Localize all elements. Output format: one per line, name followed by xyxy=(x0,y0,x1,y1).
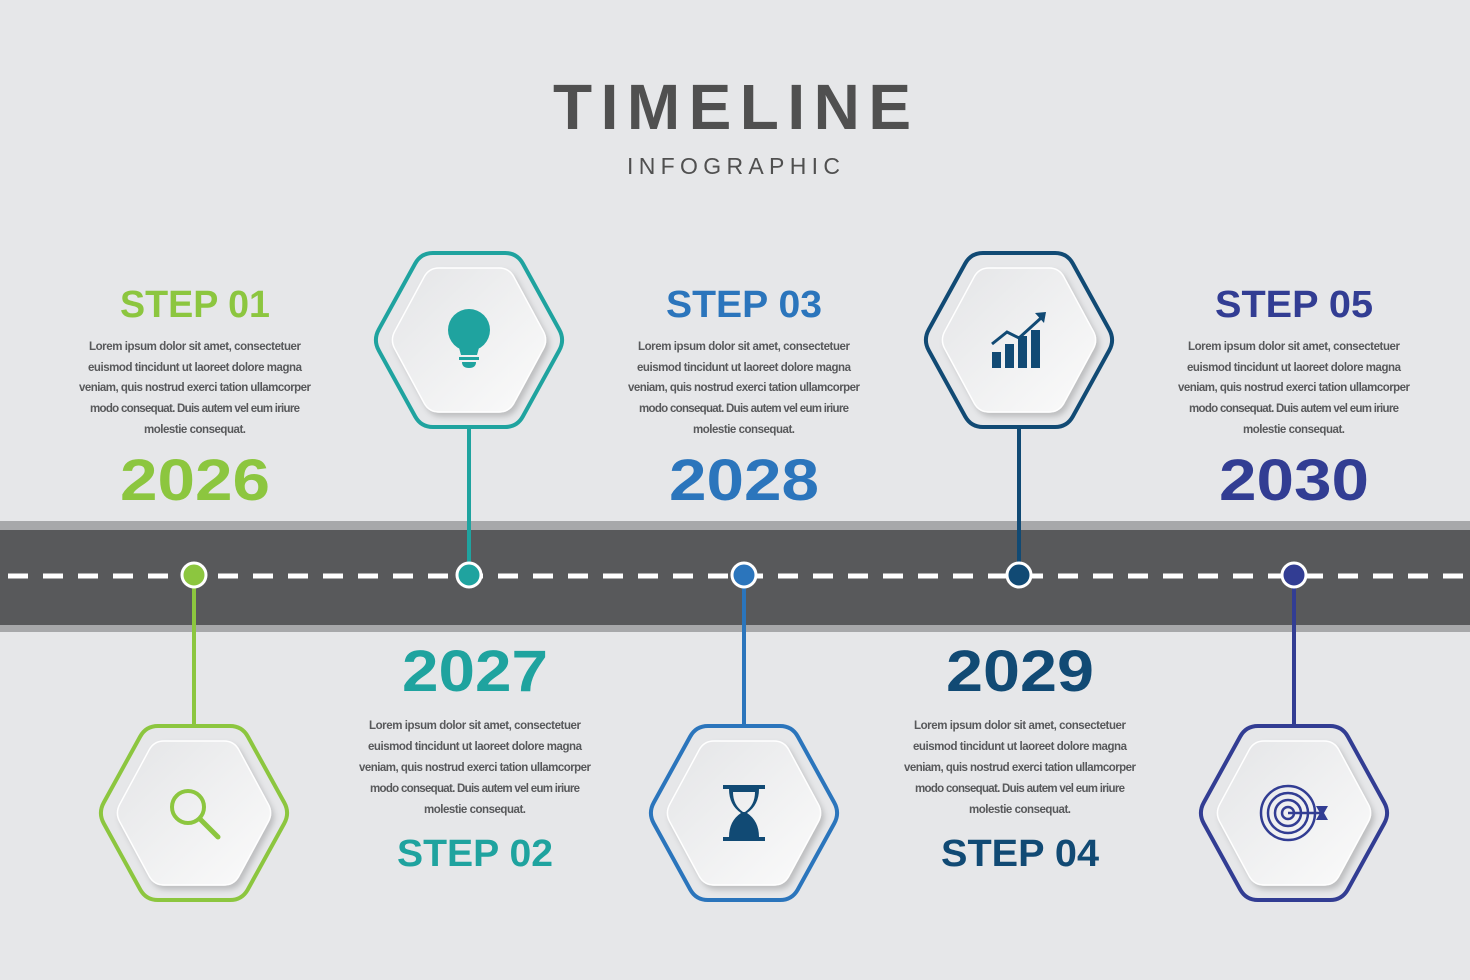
step 05 panel xyxy=(1178,284,1411,900)
connector 05 xyxy=(1292,575,1296,726)
icon: hourglass xyxy=(723,785,765,841)
icon: magnifier xyxy=(172,791,218,837)
step 03 text: molestie consequat. xyxy=(693,424,795,436)
step 04 panel xyxy=(904,253,1137,875)
step 01 text: Lorem ipsum dolor sit amet, consectetuer xyxy=(89,341,302,353)
step 04 text: Lorem ipsum dolor sit amet, consectetuer xyxy=(914,720,1127,732)
connector 02 xyxy=(467,427,471,575)
hexagon 01 xyxy=(101,726,287,900)
connector 03 xyxy=(742,575,746,726)
step 04 text: veniam, quis nostrud exerci tation ullamcorper xyxy=(904,762,1137,774)
step 03 text: modo consequat. Duis autem vel eum iriure xyxy=(639,403,849,415)
step 05 text: molestie consequat. xyxy=(1243,424,1345,436)
connector 04 xyxy=(1017,427,1021,575)
step 01 text: veniam, quis nostrud exerci tation ullamcorper xyxy=(79,382,312,394)
icon: growth chart xyxy=(992,312,1046,368)
step 04 heading: STEP 04 xyxy=(941,833,1099,875)
step 01 text: euismod tincidunt ut laoreet dolore magna xyxy=(88,362,303,374)
step 03 heading: STEP 03 xyxy=(666,284,822,326)
node 02 xyxy=(457,563,481,587)
step 02 text xyxy=(359,720,592,816)
step 05 text xyxy=(1178,341,1411,436)
step 03 text xyxy=(628,341,861,436)
step 03 text: euismod tincidunt ut laoreet dolore magna xyxy=(637,362,852,374)
node 04 xyxy=(1007,563,1031,587)
step 05 text: veniam, quis nostrud exerci tation ullamcorper xyxy=(1178,382,1411,394)
step 05 text: Lorem ipsum dolor sit amet, consectetuer xyxy=(1188,341,1401,353)
year 2028: 2028 xyxy=(669,448,819,513)
road xyxy=(0,521,1470,632)
step 02 text: euismod tincidunt ut laoreet dolore magna xyxy=(368,741,583,753)
step 03 text: veniam, quis nostrud exerci tation ullamcorper xyxy=(628,382,861,394)
step 02 panel xyxy=(359,253,592,875)
step 01 text: modo consequat. Duis autem vel eum iriure xyxy=(90,403,300,415)
icon: target xyxy=(1261,786,1328,840)
year 2029: 2029 xyxy=(946,639,1094,704)
node 03 xyxy=(732,563,756,587)
step 01 text: molestie consequat. xyxy=(144,424,246,436)
step 04 text: modo consequat. Duis autem vel eum iriure xyxy=(915,783,1125,795)
year 2027: 2027 xyxy=(402,639,548,704)
subtitle: INFOGRAPHIC xyxy=(627,153,845,179)
year 2030: 2030 xyxy=(1219,448,1369,513)
step 02 heading: STEP 02 xyxy=(397,833,553,875)
step 05 heading: STEP 05 xyxy=(1215,284,1373,326)
connector 01 xyxy=(192,575,196,726)
step 04 text: euismod tincidunt ut laoreet dolore magna xyxy=(913,741,1128,753)
step 01 heading: STEP 01 xyxy=(120,284,270,326)
year 2026: 2026 xyxy=(120,448,270,513)
node 01 xyxy=(182,563,206,587)
icon: light bulb xyxy=(448,309,490,368)
step 05 text: modo consequat. Duis autem vel eum iriure xyxy=(1189,403,1399,415)
hexagon 02 xyxy=(376,253,562,427)
step 02 text: molestie consequat. xyxy=(424,804,526,816)
node 05 xyxy=(1282,563,1306,587)
step 03 text: Lorem ipsum dolor sit amet, consectetuer xyxy=(638,341,851,353)
step 01 panel xyxy=(79,284,312,900)
hexagon 04 xyxy=(926,253,1112,427)
hexagon 05 xyxy=(1201,726,1387,900)
title: TIMELINE xyxy=(553,71,919,143)
hexagon 03 xyxy=(651,726,837,900)
step 05 text: euismod tincidunt ut laoreet dolore magna xyxy=(1187,362,1402,374)
step 04 text xyxy=(904,720,1137,816)
step 02 text: Lorem ipsum dolor sit amet, consectetuer xyxy=(369,720,582,732)
step 03 panel xyxy=(628,284,861,900)
step 02 text: veniam, quis nostrud exerci tation ullamcorper xyxy=(359,762,592,774)
step 04 text: molestie consequat. xyxy=(969,804,1071,816)
step 02 text: modo consequat. Duis autem vel eum iriure xyxy=(370,783,580,795)
step 01 text xyxy=(79,341,312,436)
